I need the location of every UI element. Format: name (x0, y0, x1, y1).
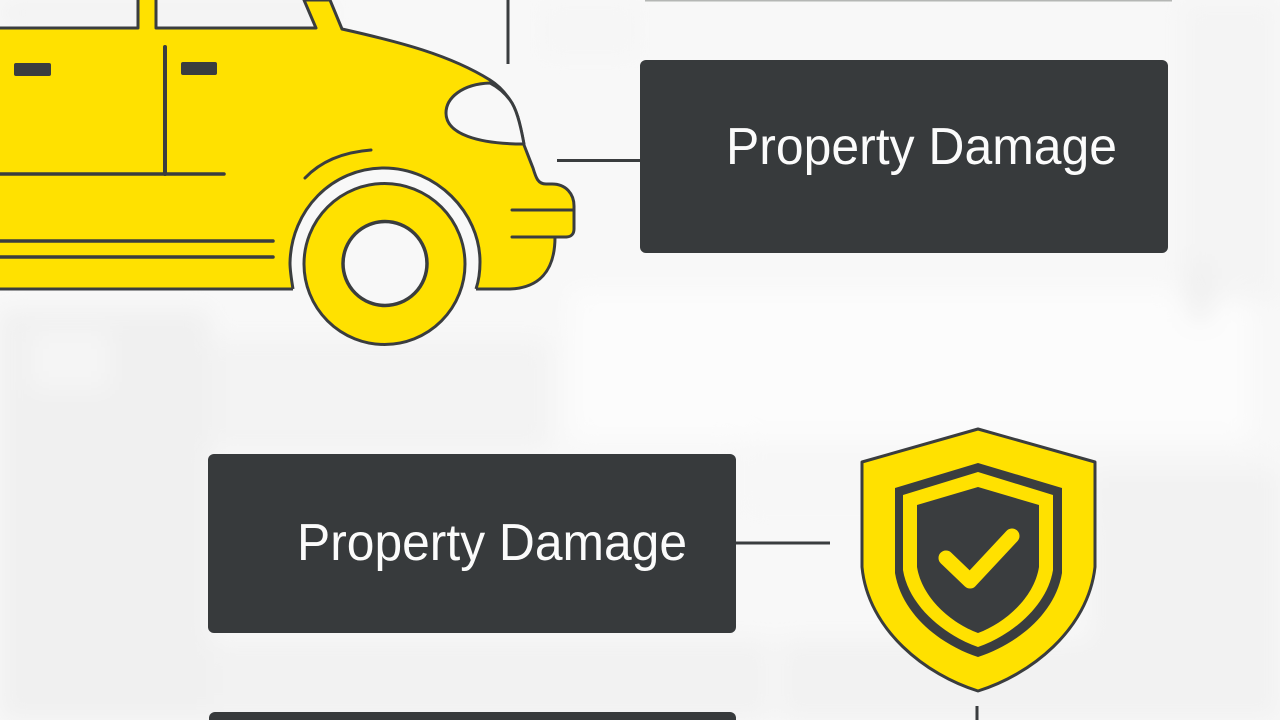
checkmark (946, 536, 1012, 581)
connector: lower label to shield (736, 542, 830, 544)
door handle left (14, 63, 51, 76)
connector: car to top label (557, 159, 640, 162)
bumper lines (512, 210, 573, 237)
arch outline (290, 168, 480, 289)
wheel hub (343, 222, 427, 306)
connector: shield downward (976, 706, 978, 720)
panel: lower Property Damage label (208, 454, 736, 633)
connector: vertical line from top (506, 0, 510, 64)
arch gap (290, 168, 480, 292)
car body (0, 0, 574, 289)
icon: yellow car (0, 0, 574, 344)
door sill line (0, 172, 224, 176)
icon: shield with checkmark (862, 429, 1095, 691)
side stripes (0, 241, 273, 257)
door handle right (181, 62, 217, 75)
panel: bottom label (cropped) (209, 712, 736, 720)
headlight (446, 83, 524, 144)
door seam (163, 47, 167, 174)
top box bottom edge (645, 0, 1172, 2)
pillar between windows (140, 0, 154, 27)
panel: upper Property Damage label (640, 60, 1168, 253)
label text: Property Damage (726, 118, 1117, 176)
wheel tyre (304, 184, 465, 344)
label text: Property Damage (297, 514, 687, 572)
fender arc (305, 150, 371, 178)
